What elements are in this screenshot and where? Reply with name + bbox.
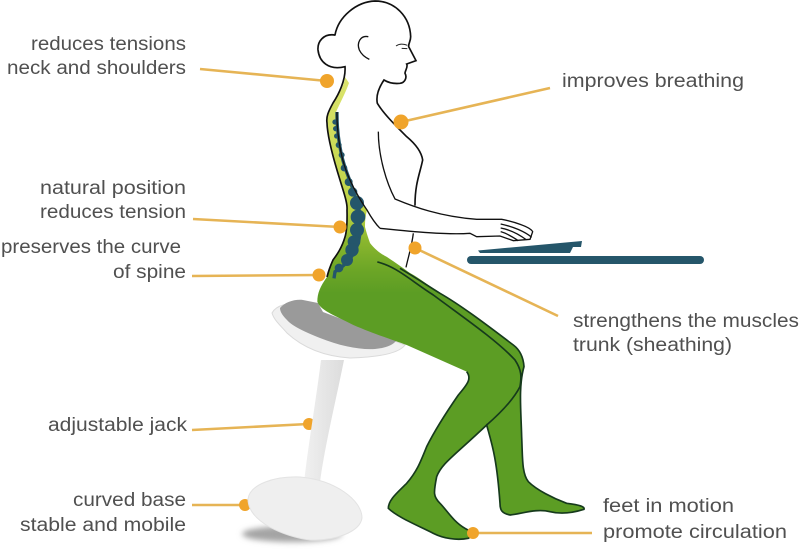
label: preserves curve bbox=[1, 237, 186, 283]
label: reduces tensions bbox=[7, 34, 186, 79]
label: preserves curve: of spine bbox=[113, 262, 186, 283]
hair bun and back outline bbox=[318, 35, 347, 277]
callout: natural position bbox=[193, 219, 346, 234]
callout: breathing bbox=[394, 88, 550, 130]
label: reduces tensions: neck and shoulders bbox=[7, 58, 186, 79]
label: curved base bbox=[20, 490, 186, 536]
thigh contour lines bbox=[377, 262, 521, 425]
label: feet in motion: feet in motion bbox=[603, 496, 734, 517]
callout: curve of spine bbox=[192, 268, 326, 282]
head and front torso outline bbox=[335, 1, 423, 205]
label: curved base: stable and mobile bbox=[20, 515, 186, 536]
lower belly line bbox=[406, 233, 413, 267]
label: strengthens: strengthens the muscles bbox=[573, 311, 799, 332]
callout: neck bbox=[200, 69, 334, 88]
stool seat rim bbox=[272, 303, 405, 358]
green lower body and torso bbox=[317, 77, 584, 539]
callout: jack bbox=[192, 418, 315, 430]
callout lines and dots bbox=[192, 69, 592, 539]
label: strengthens: trunk (sheathing) bbox=[573, 335, 732, 356]
stool bbox=[242, 300, 405, 542]
ear bbox=[358, 36, 369, 59]
spine bbox=[332, 112, 365, 278]
stool curved base bbox=[248, 477, 362, 540]
arm and hand bbox=[378, 132, 533, 241]
label: adjustable jack: adjustable jack bbox=[48, 415, 188, 436]
callout: trunk muscles bbox=[408, 242, 558, 316]
label: natural position bbox=[40, 178, 186, 223]
callout: feet bbox=[467, 527, 592, 539]
label: natural position: natural position bbox=[40, 178, 186, 199]
back of arm pit line bbox=[337, 112, 380, 228]
desk top bbox=[467, 256, 704, 264]
eye bbox=[396, 44, 407, 49]
label: natural position: reduces tension bbox=[40, 202, 186, 223]
label: strengthens bbox=[573, 311, 799, 356]
label: improves breathing: improves breathing bbox=[562, 71, 744, 92]
stool base shadow bbox=[242, 526, 342, 542]
label: curved base: curved base bbox=[73, 490, 186, 511]
desk and keyboard bbox=[467, 241, 704, 264]
stool stem bbox=[304, 360, 344, 482]
label: feet in motion bbox=[603, 496, 787, 543]
stool seat cushion bbox=[280, 300, 397, 349]
keyboard bbox=[478, 241, 582, 253]
label: preserves curve: preserves the curve bbox=[1, 237, 181, 258]
callouts behind stool bbox=[192, 418, 315, 511]
label: reduces tensions: reduces tensions bbox=[31, 34, 186, 55]
callout: base bbox=[192, 499, 251, 511]
leg outlines bbox=[388, 268, 584, 539]
label: feet in motion: promote circulation bbox=[603, 522, 787, 543]
seated figure bbox=[317, 1, 584, 539]
